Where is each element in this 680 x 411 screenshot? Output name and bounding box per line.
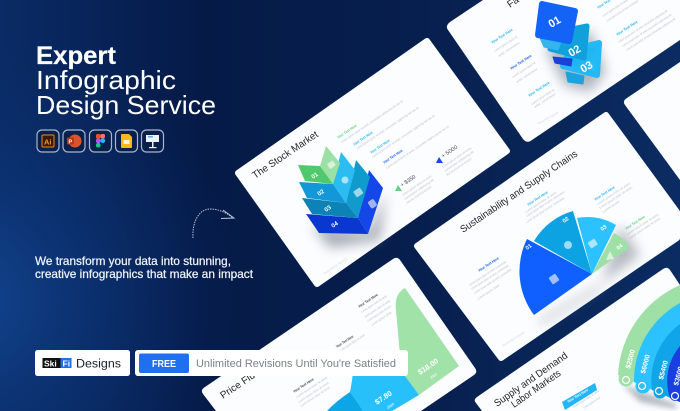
text block: subheading: creative infographics that make an impact [35, 267, 254, 281]
button: your text here: Your Text Here [566, 388, 589, 404]
labels: arc values: $6000 [640, 354, 652, 375]
shape: 2021 green [396, 288, 459, 395]
chart shadow: stairs [312, 192, 386, 248]
text block: stock row 1: Your Text Here [336, 124, 358, 140]
text block: price lower: Your Text Here [292, 377, 315, 394]
stat: plus 5000 [436, 145, 475, 177]
stat: plus 350: consectetur adipiscing elit [403, 178, 435, 201]
labels: arc values: $5400 [658, 360, 670, 381]
text block: sector 01 [468, 256, 513, 301]
tab b [553, 57, 572, 66]
text block: subheading [35, 254, 254, 281]
arc 5400 [651, 324, 680, 402]
text block: sector 02: Lorem ipsum dolor sit amet, consectetur [525, 196, 566, 224]
text block: factors left 1 [490, 28, 521, 58]
text block: price middle: Lorem ipsum dolor sit amet [338, 333, 366, 353]
heading: the stock market: The Stock Market [251, 129, 321, 181]
sector 02 [534, 211, 592, 274]
icon: sector glyphs [548, 238, 614, 285]
heading: sustainability and supply chains: Sustainability and Supply Chains [459, 149, 580, 235]
icon: powerpoint: P [68, 140, 72, 146]
sector numbers [525, 216, 625, 252]
shape: 2019 blue [327, 392, 363, 411]
button: free [139, 354, 189, 373]
chart: fan pie [519, 211, 630, 315]
text block: price lower: Lorem ipsum dolor sit amet, [297, 381, 330, 404]
value: 18.00: $18.00 [416, 356, 440, 377]
text block: sector 01: Lorem ipsum dolor sit amet, consectetur [470, 263, 510, 291]
chart: price shapes [327, 288, 459, 411]
icon: figma [90, 130, 112, 152]
title: Expert [36, 42, 117, 70]
text block: sector 04: Your Text Here [624, 215, 646, 231]
layer 04: 04 [331, 221, 340, 230]
arc 6000 [634, 303, 680, 402]
badge: skifi designs logo: Designs [76, 358, 121, 370]
text block: sector 02: Your Text Here [526, 190, 549, 207]
text block: price top: Lorem ipsum dolor sit amet [363, 299, 391, 319]
icon: arc badges [622, 376, 678, 400]
text block: sector 04: Lorem ipsum dolor sit amet, [626, 212, 660, 236]
text block: stock row 4: Lorem ipsum dolor sit amet, consectetur adipiscing elit sed do [385, 124, 450, 170]
sector numbers: 02 [562, 216, 570, 225]
arc 3600 [667, 346, 680, 402]
text block: price top: Your Text Here [357, 293, 379, 309]
button: your text here [562, 383, 597, 410]
text block: factors left 2: amet, consectetur [515, 66, 539, 84]
text block: sector 03: Lorem ipsum dolor sit amet, [596, 181, 631, 206]
text block: factors left 1: Your Text Here [490, 28, 514, 45]
text block: factors left 3 [527, 81, 557, 109]
button: free: FREE [152, 359, 176, 370]
panel: the stock market card [238, 41, 507, 284]
text block: factors left 1: amet, consectetur [497, 40, 521, 58]
stat: plus 5000: consectetur adipiscing elit [443, 150, 475, 173]
text block: stock row 2: Lorem ipsum dolor sit amet, consectetur adipiscing elit sed do [355, 105, 420, 151]
text block: sector 02: Lorem ipsum dolor sit amet, consectetur [525, 190, 566, 218]
text block: factors right 2: Your Text Here [615, 20, 639, 37]
shape: 2020 cyan [350, 372, 419, 411]
title: Infographic [36, 65, 176, 95]
sector 01 [519, 239, 592, 315]
text block: price top: Lorem ipsum dolor [370, 310, 393, 327]
stat: plus 350 [395, 174, 435, 205]
icon row: software [37, 130, 164, 152]
text block: sector 04: Lorem ipsum dolor sit amet, [628, 216, 662, 240]
text block: sector 02: Lorem ipsum dolor sit amet, [524, 190, 558, 214]
text block: stock row 1: Lorem ipsum dolor sit amet, consectetur adipiscing elit sed do [340, 99, 404, 144]
text block: stock row 3: Your Text Here [369, 139, 391, 155]
text block: factors right 1 [596, 0, 640, 23]
badge: skifi designs logo: Ski [44, 358, 57, 368]
chart shadow: arcs [622, 384, 676, 409]
text block: sector 03: Lorem ipsum [601, 199, 621, 214]
text block: price top: Lorem ipsum dolor sit amet [366, 304, 392, 323]
stat: plus 5000: sed do eiusmod tempor [445, 156, 473, 177]
text block: stock row 2: Your Text Here [352, 131, 374, 147]
arc 2500 [618, 285, 680, 402]
icon: keynote [142, 130, 164, 152]
value: 7.80: 2020 [386, 402, 395, 410]
stat: plus 350: sed do eiusmod tempor [405, 184, 433, 205]
sector 03 [577, 217, 616, 274]
stat: plus 5000: Lorem ipsum dolor sit amet, [441, 146, 473, 169]
text block: factors left 2: Your Text Here [509, 54, 533, 71]
tile 01: 01 [546, 14, 563, 31]
stat: plus 5000: + 5000 [441, 145, 459, 160]
text block: factors left 3: amet, consectetur [533, 91, 557, 109]
sector numbers: 04 [616, 243, 625, 252]
icon: google slides [116, 130, 138, 152]
text block: sector 03: Your Text Here [593, 185, 616, 202]
text block: subheading: We transform your data into stunning, [35, 254, 231, 268]
text: sustainability footer: Presentation Agenda [501, 330, 526, 348]
text block: stock row 3: Lorem ipsum dolor sit amet, consectetur adipiscing elit sed do [371, 113, 436, 159]
text block: sector 01: Lorem ipsum dolor sit amet, consectetur [473, 267, 513, 295]
chart shadow: pie [540, 225, 640, 325]
text block: factors left 1: Lorem ipsum dolor sit [493, 35, 518, 53]
tile 02: 02 [566, 43, 583, 60]
text block: price lower [292, 375, 331, 408]
stat: plus 350: Lorem ipsum dolor sit amet, [401, 174, 433, 197]
text block: sector 03: Lorem ipsum dolor sit amet, [598, 185, 633, 210]
text block: supply lines: Lorem ipsum dolor [582, 395, 602, 410]
panel: far right card [624, 62, 680, 180]
text block: price middle [335, 333, 366, 353]
text block: factors left 2: Lorem ipsum dolor sit [511, 61, 536, 79]
text block: price lower: Lorem ipsum dolor sit amet, [299, 385, 331, 408]
layer 02: 02 [317, 189, 326, 198]
text block: sector 01: Your Text Here [477, 256, 500, 273]
icon: layer glyphs [327, 160, 378, 209]
chart: concentric arcs [618, 285, 680, 402]
sector numbers: 03 [600, 224, 608, 233]
heading: supply and demand: Labor Markets [509, 368, 563, 410]
title: Design Service [36, 90, 216, 120]
stat: plus 350: + $350 [400, 174, 417, 189]
layer 01: 01 [311, 172, 320, 181]
title [36, 42, 216, 120]
text block: sector 01: Lorem ipsum dolor sit amet, consectetur [468, 259, 508, 287]
badge: skifi designs logo [35, 350, 130, 376]
layer 03: 03 [324, 205, 333, 214]
text: factors footer: Presentation Agenda [536, 110, 559, 126]
text block: supply lines [572, 389, 602, 410]
text block: factors left 3: Lorem ipsum dolor sit [530, 88, 555, 106]
text block: factors left 2 [509, 54, 539, 84]
heading: supply and demand: Supply and Demand [492, 351, 570, 409]
panel: sustainability and supply chains card [417, 115, 677, 358]
icon: illustrator: Ai [44, 138, 52, 146]
icon shadow: stacked tiles [545, 30, 606, 92]
banner: free unlimited revisions [135, 350, 408, 376]
text block: price middle: Your Text Here [335, 335, 354, 349]
text block: factors left 3: Your Text Here [527, 81, 551, 98]
badge: skifi designs logo: Fi [62, 358, 70, 368]
text: stock footer: Presentation Agenda [322, 257, 348, 276]
tab a [540, 38, 561, 50]
text block: stock row 4: Your Text Here [382, 149, 404, 165]
text block: sector 01: Lorem ipsum dolor [476, 283, 501, 301]
labels: arc values [625, 349, 680, 387]
labels: arc values: $2500 [625, 349, 637, 370]
panel: supply and demand card [475, 268, 680, 411]
heading: price fluctuation: Price Fluctuation [219, 351, 286, 401]
text block: supply lines: Lorem ipsum dolor sit amet [572, 389, 600, 409]
value: 18.00: 2021 [429, 372, 438, 380]
tile 03: 03 [578, 59, 595, 76]
panel: factors card [447, 0, 680, 142]
sector numbers: 01 [525, 243, 533, 252]
text block: price top: Lorem ipsum dolor sit amet [360, 294, 388, 314]
sector 04 [592, 233, 630, 274]
value: 7.80: $7.80 [373, 389, 394, 407]
arc end caps [618, 372, 680, 401]
text block: sector 03 [593, 181, 633, 214]
panel: price fluctuation card [202, 258, 476, 411]
chart: 3D stair layers [298, 146, 383, 234]
icon: stacked number tiles [538, 4, 599, 84]
tab c [566, 72, 584, 84]
text: unlimited revisions: Unlimited Revisions Until You're Satisfied [196, 358, 396, 370]
arrow: dashed curve [193, 209, 234, 238]
text block: price lower: Lorem ipsum dolor sit amet, [295, 375, 329, 399]
text block: price top [357, 293, 393, 327]
